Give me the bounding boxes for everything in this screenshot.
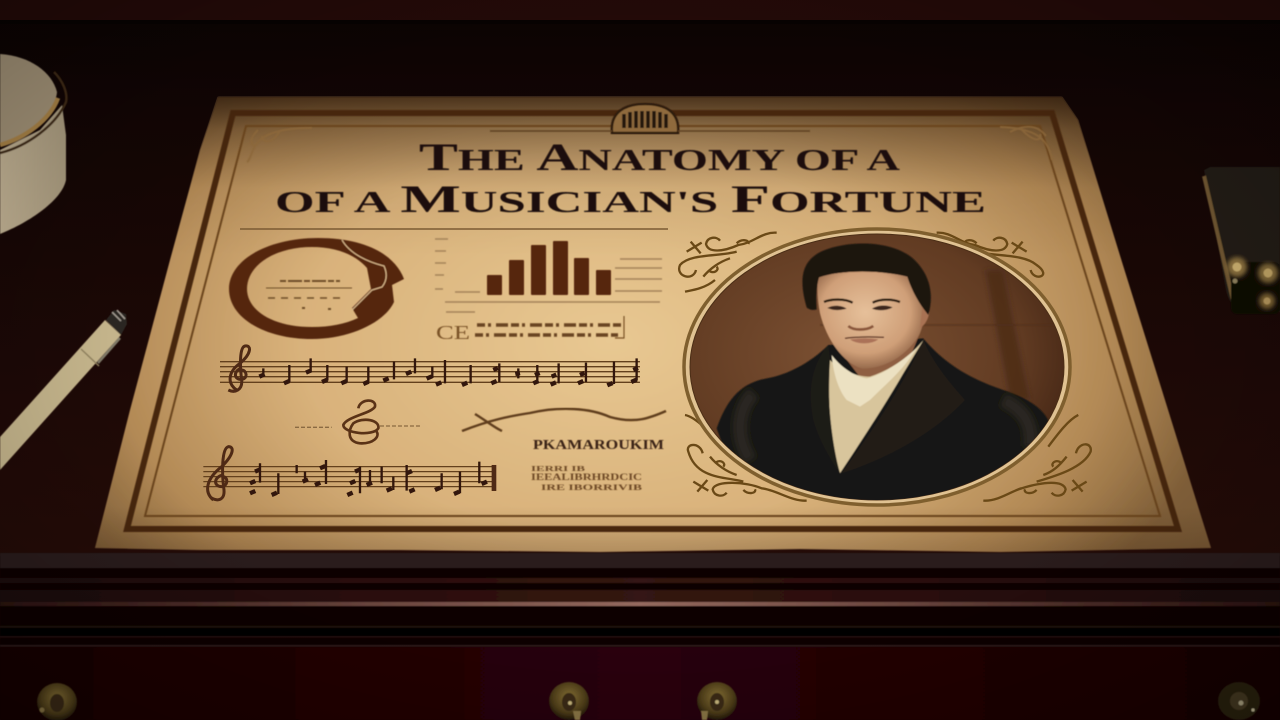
title [275,136,986,221]
icon: phone with gold studs [1204,167,1280,314]
small caption text: IERRI IB [531,464,585,473]
decorative treble ornament [295,401,420,443]
corner flourishes [247,127,1052,162]
lapels [842,340,965,473]
neck [847,336,919,378]
decorative border [127,113,1178,529]
caption label: PKAMAROUKIM [533,437,664,452]
panel: parchment infographic [95,97,1211,552]
wall panel [985,270,1030,400]
jacket sheen [740,393,1031,460]
portrait medallion [679,229,1091,520]
knob 2 [549,682,589,720]
mouth [845,337,884,338]
knob 1 [37,683,77,720]
portrait figure [717,244,1060,520]
knob 4 [1218,682,1260,720]
shirt and cravat [829,339,924,473]
bar chart [435,239,662,312]
small caption text: IRE IBORRIVIB [541,482,643,492]
knob 3 [697,682,737,720]
face [817,272,924,368]
parchment sheet [95,97,1211,552]
donut chart [229,238,404,339]
eyes [827,305,893,310]
chart caption: CE [436,322,470,344]
portrait background [690,234,1064,500]
divider under title [240,228,668,230]
hair [802,244,931,315]
small caption text [531,464,643,492]
title: T HE A NATOMY OF A [419,136,901,179]
brows [824,300,900,303]
drawer knobs [37,682,1260,720]
chart caption [436,316,624,344]
facial features [824,300,900,343]
desk front moulding [0,553,1280,720]
donut centre text [266,281,352,309]
curved line ornament [462,409,666,431]
seal at top of page [490,104,810,133]
ornament bottom right [983,415,1091,501]
ornament bottom left [685,415,807,501]
wooden desk background [0,0,1280,556]
music staff 2 [203,447,496,500]
ornament top left [679,233,777,292]
ornament top right [937,233,1043,292]
treble clef [228,346,249,391]
treble clef [208,447,232,500]
notes [259,368,638,385]
jacket [716,338,1048,500]
title: OF A M USICIAN'S F ORTUNE [275,178,986,221]
right ear [922,309,930,326]
nose shadow [848,326,873,329]
icon: lidded cream box [0,54,66,234]
icon: pen [0,310,127,470]
music staff 1 [220,346,640,391]
notes [250,466,487,495]
small caption text: IEEALIBRHRDCIC [531,472,642,482]
gold ring [684,229,1070,505]
scroll ornaments around portrait [679,233,1091,501]
